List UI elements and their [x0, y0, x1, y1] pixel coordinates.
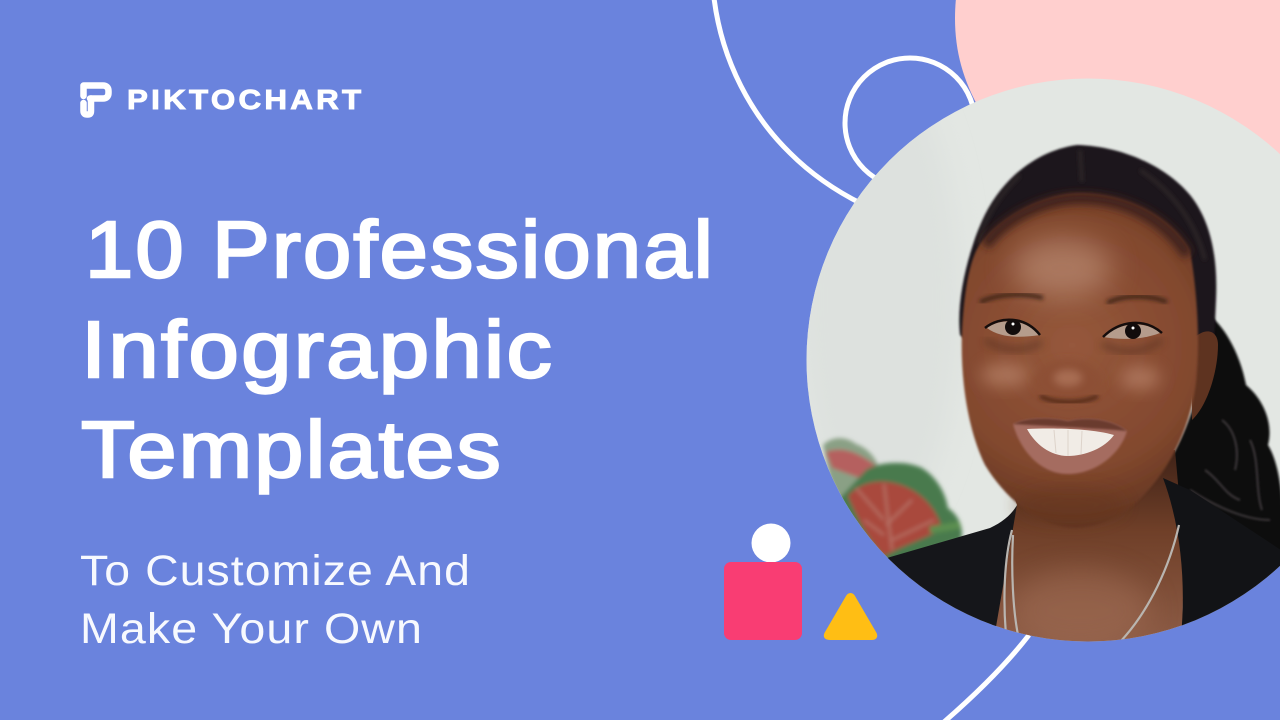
hair top: [959, 145, 1216, 345]
face: [962, 193, 1198, 528]
Piktochart logo: [84, 85, 364, 116]
circular portrait photo: [800, 70, 1280, 660]
left blazer: [888, 505, 1017, 626]
large white arc bottom: [944, 635, 1029, 720]
title: [81, 205, 715, 494]
title line 1: 10 Professional: [85, 205, 715, 294]
forehead highlight: [1012, 238, 1112, 298]
subtitle line 1: To Customize And: [80, 547, 471, 595]
nose underside shadow: [1040, 396, 1098, 402]
logo wordmark: PIKTOCHART: [127, 85, 364, 116]
under-eye shadows: [985, 340, 1162, 351]
decorative shapes: [724, 524, 877, 640]
chest highlight: [1016, 567, 1144, 642]
left cheek highlight: [981, 363, 1029, 387]
icon: white circle: [752, 524, 790, 562]
photo backdrop wall: [800, 70, 1280, 650]
mouth: [1013, 418, 1127, 474]
hair part and sheen: [978, 150, 1205, 260]
small white ring: [845, 58, 975, 188]
title line 2: Infographic: [81, 305, 554, 394]
ear: [1192, 331, 1218, 420]
chin shading: [1008, 498, 1017, 514]
subtitle line 2: Make Your Own: [80, 605, 423, 653]
right eye: [1103, 323, 1162, 339]
subtitle: [80, 547, 471, 653]
left eye: [985, 319, 1040, 337]
hairline shadow: [985, 198, 1188, 255]
right eyebrow: [1107, 296, 1167, 303]
neck and chest: [986, 450, 1184, 650]
logo icon: [84, 86, 108, 114]
right blazer: [1163, 478, 1280, 626]
left eyebrow: [980, 295, 1043, 302]
necklace: [1004, 525, 1179, 642]
icon: yellow triangle: [824, 593, 877, 640]
right cheek highlight: [1120, 366, 1160, 390]
nose: [1054, 369, 1082, 388]
title line 3: Templates: [81, 405, 503, 494]
large white arc top: [714, 0, 862, 204]
wall shading: [806, 122, 937, 510]
icon: pink square: [724, 562, 802, 640]
plant leaves: [823, 438, 962, 562]
pink background shape: [955, 0, 1280, 165]
hair back curls: [1174, 318, 1280, 550]
